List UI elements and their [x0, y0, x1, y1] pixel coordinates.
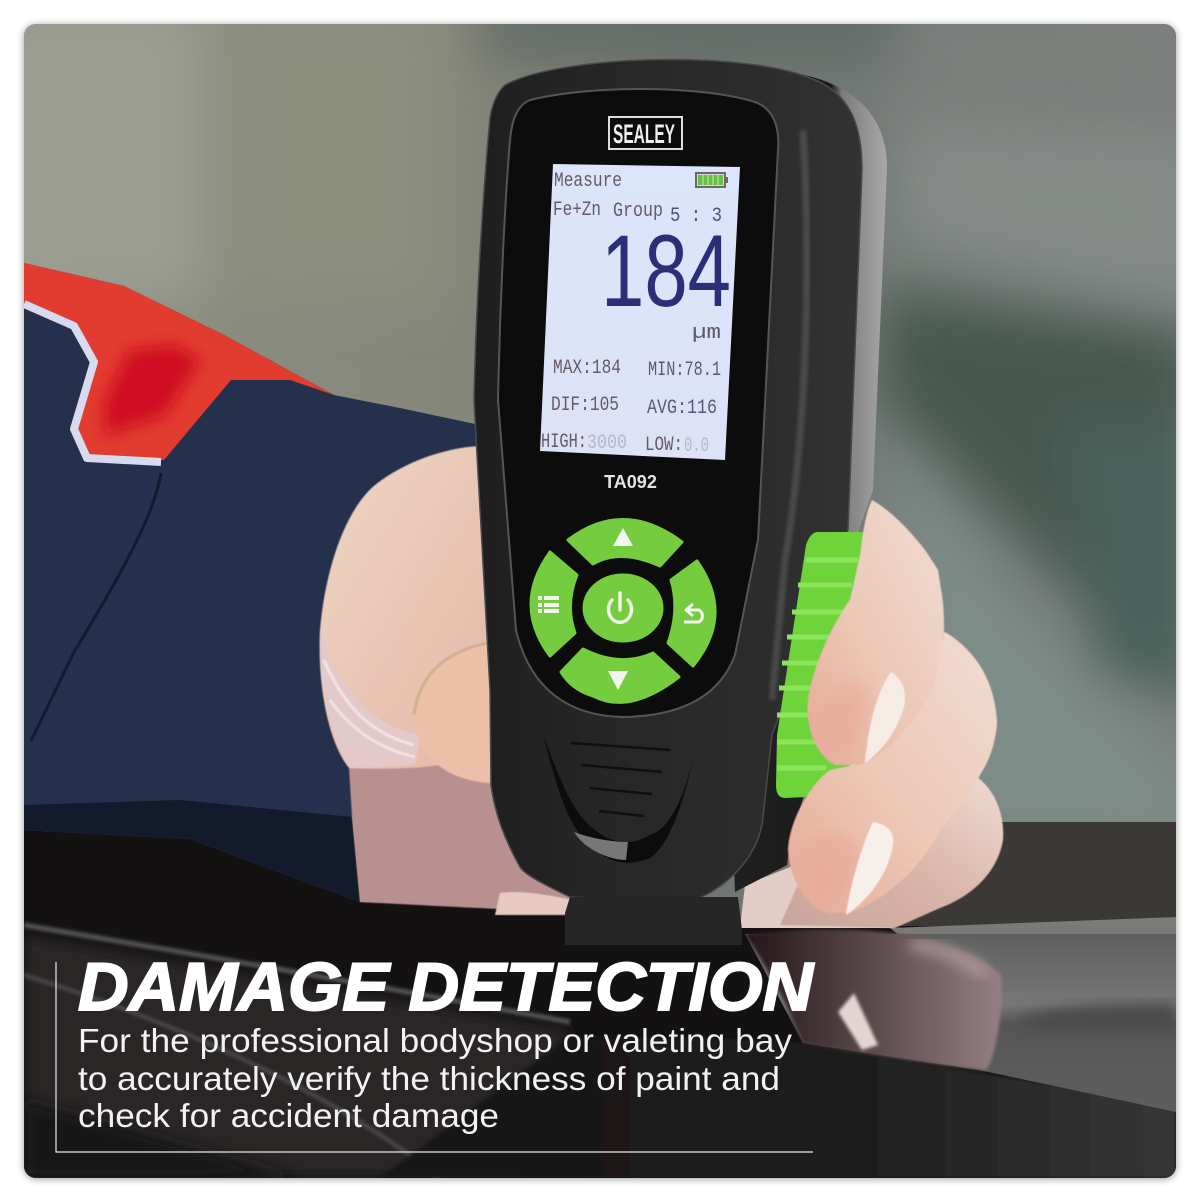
- battery icon: [696, 173, 728, 187]
- LCD screen: DIF:105: [551, 394, 619, 417]
- caption: [56, 949, 815, 1152]
- LCD screen: µm: [692, 322, 721, 345]
- LCD screen: [540, 164, 740, 460]
- description: to accurately verify the thickness of paint and: [78, 1060, 780, 1097]
- index finger: [807, 500, 943, 765]
- LCD screen: 3000: [587, 432, 627, 455]
- icon: menu: [538, 596, 559, 613]
- icon: down arrow: [608, 671, 628, 690]
- car surface: [24, 830, 1176, 1178]
- icon: back: [684, 604, 702, 622]
- device highlight: [772, 130, 807, 700]
- LCD screen: Fe+Zn: [553, 199, 601, 222]
- LCD screen: 5 : 3: [670, 205, 722, 228]
- brand logo: [609, 117, 682, 149]
- icon: up arrow: [613, 528, 633, 546]
- foot highlight: [566, 923, 740, 929]
- LCD screen: MAX:184: [553, 357, 621, 380]
- fingers: [780, 500, 1003, 928]
- LCD screen: 184: [601, 214, 731, 328]
- hand palm and thumb: [318, 446, 570, 916]
- hand reflection: [745, 929, 1002, 1070]
- front bezel: [498, 89, 778, 717]
- LCD screen: HIGH:: [541, 431, 587, 454]
- keypad: [531, 519, 715, 702]
- device: [474, 60, 887, 945]
- photo background: [0, 0, 1200, 924]
- third finger: [780, 777, 1003, 928]
- LCD screen: AVG:116: [647, 397, 717, 420]
- icon: power: [608, 593, 632, 622]
- description: check for accident damage: [78, 1097, 499, 1134]
- LCD screen: LOW:: [645, 434, 683, 457]
- description: [78, 1022, 793, 1134]
- vent: [543, 735, 695, 863]
- LCD screen: 0.0: [684, 435, 709, 458]
- description: For the professional bodyshop or valeting bay: [78, 1022, 793, 1059]
- model label: TA092: [604, 472, 657, 492]
- LCD screen: MIN:78.1: [648, 359, 721, 382]
- LCD screen: Group: [613, 200, 663, 223]
- device body: [474, 60, 862, 902]
- nail: middle: [846, 822, 893, 915]
- brand logo: SEALEY: [613, 119, 675, 149]
- heading: DAMAGE DETECTION: [78, 949, 815, 1025]
- device side: [734, 74, 887, 892]
- finger pad blush: [830, 684, 868, 738]
- LCD screen: Measure: [554, 170, 622, 193]
- nail: index: [865, 672, 905, 763]
- probe foot: [565, 897, 742, 945]
- vent scoop: [543, 735, 695, 863]
- dark car edge: [898, 822, 1176, 926]
- back of hand: [850, 502, 996, 772]
- middle finger: [788, 632, 997, 913]
- grip: [776, 532, 870, 798]
- sleeve: [24, 263, 480, 902]
- vent highlight: [574, 832, 628, 860]
- skin behind device foot: [740, 865, 895, 928]
